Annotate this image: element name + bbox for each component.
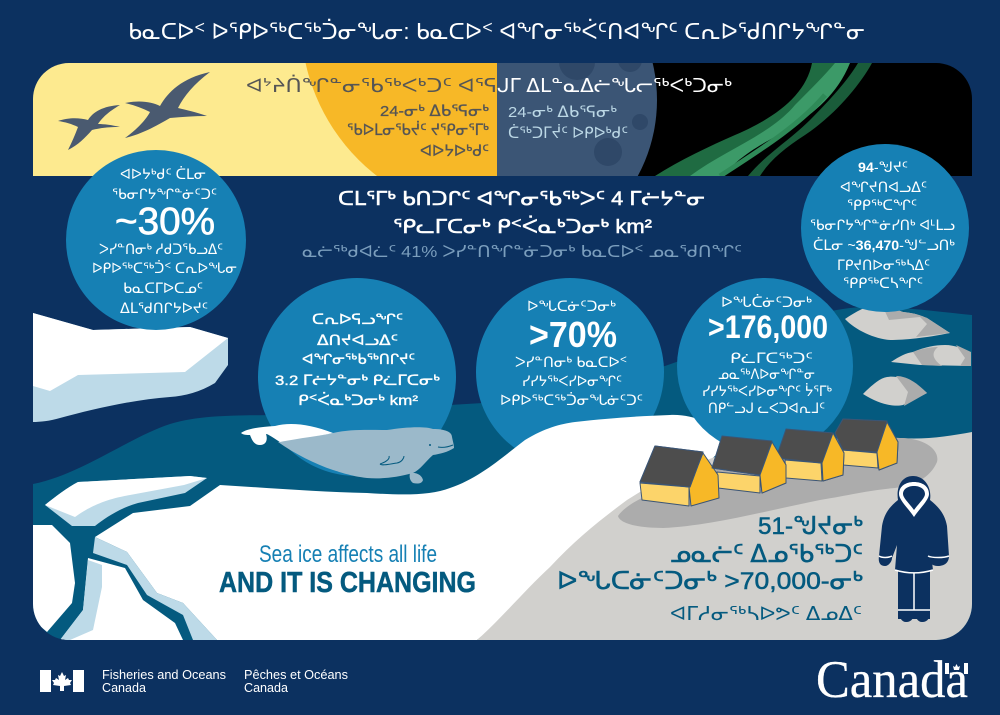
circle stat: islands: ᑖᒪᓂ ~36,470-ᖑᓪᓗᑎᒃ xyxy=(813,237,955,253)
heading: cycles of light: ᒍᒥ ᐃᒪᓐᓇᐃᓖᖓᓕᖅᐸᒃᑐᓂᒃ xyxy=(497,76,732,97)
icon: birds xyxy=(58,72,210,150)
circle stat: 176,000 km coastline: ᑎᑭᓪᓗᒍ ᓚᐸᑐᐊᕆᒧᑦ xyxy=(708,400,825,416)
text: 51 communities xyxy=(557,513,863,625)
circle stat: 30% xyxy=(66,150,246,330)
text: 51 communities: ᓄᓇᓖᑦ ᐃᓄᖃᖅᑐᑦ xyxy=(670,541,863,568)
circle stat: 30%: ᖃᓂᒋᔭᖏᓐᓃᑦᑐᑦ xyxy=(112,186,217,202)
circle stat: more than 70%: ᐅᖓᑕᓃᑦᑐᓂᒃ xyxy=(527,298,616,314)
rocks xyxy=(845,303,971,406)
house 2 xyxy=(712,436,786,493)
title: ᑲᓇᑕᐅᑉ ᐅᕿᐅᖅᑕᖅᑑᓂᖓᓂ: ᑲᓇᑕᐅᑉ ᐊᖏᓂᖅᐹᑦᑎᐊᖏᑦ ᑕᕆᐅᖁᑎᒋᔭᖏᓐᓂ xyxy=(128,18,865,44)
footer: department signature: Fisheries and Oceans xyxy=(102,667,226,682)
text: 51 communities: ᐅᖓᑕᓃᑦᑐᓂᒃ >70,000-ᓂᒃ xyxy=(557,568,863,595)
icon: person in parka xyxy=(879,476,949,622)
text: 24 hours of sun: ᐊᐅᔭᐅᒃᑯᑦ xyxy=(420,143,489,160)
circle stat: islands: ᖃᓂᒋᔭᖏᓐᓃᓯᑎᒃ ᐊᒻᒪᓗ xyxy=(810,217,955,233)
text: central statistic: ᓇᓖᖅᑯᐊᓛᑦ 41% ᐳᓯᓐᑎᖏᓐᓃᑐᓂᒃ ᑲᓇᑕᐅᑉ ᓄᓇᖁᑎᖏᑦ xyxy=(302,244,742,261)
circle stat: 176,000 km coastline: >176,000 xyxy=(708,309,828,345)
text: sea ice affects all life: Sea ice affects all life xyxy=(259,541,437,568)
circle stat: islands: 94-ᖑᔪᑦ xyxy=(858,159,908,175)
circle stat: 30%: ᑲᓇᑕᒥᐅᑕᓄᑦ xyxy=(123,280,203,296)
text: 24 hours of dark xyxy=(508,104,628,142)
snow hill xyxy=(95,415,735,640)
circle stat: islands: ᕿᑭᖅᑕᓴᖏᑦ xyxy=(843,275,923,291)
house 1 xyxy=(640,446,719,506)
house 4 xyxy=(835,419,898,470)
text: sea ice affects all life: AND IT IS CHANGING xyxy=(219,567,476,599)
circle stat: 30%: ᐅᑭᐅᖅᑕᖅᑑᑉ ᑕᕆᐅᖓᓂ xyxy=(92,260,237,276)
road xyxy=(618,438,937,528)
footer: department signature: Canada xyxy=(244,680,289,695)
text: central statistic xyxy=(302,189,742,261)
text: sea ice affects all life xyxy=(219,544,475,592)
circle stat: 176,000 km coastline: ᓄᓇᖅᐱᐅᓂᖏᓐᓂ xyxy=(718,366,815,382)
text: 24 hours of sun: 24-ᓂᒃ ᐃᑲᕐᕋᓂᒃ xyxy=(380,103,489,120)
text: 24 hours of sun xyxy=(347,103,489,160)
text: 24 hours of sun: ᖃᐅᒪᓂᖃᔫᑦ ᔪᕿᓂᕐᒥᒃ xyxy=(347,121,489,139)
text: central statistic: ᑕᒪᕐᒥᒃ ᑲᑎᑐᒋᑦ ᐊᖏᓂᖃᖅᐳᑦ 4 ᒥᓖᔭᓐᓂ xyxy=(338,189,705,210)
footer: department signature xyxy=(40,667,348,695)
circle stat: 176,000 km coastline: ᑭᓛᒥᑕᖅᑐᑦ xyxy=(730,350,813,366)
circle stat: 176,000 km coastline xyxy=(677,278,853,454)
circle stat: islands: ᒥᑭᔪᑎᐅᓂᖅᓴᐃᑦ xyxy=(837,257,930,273)
icon: beluga whale xyxy=(241,424,454,484)
heading: cycles of light: ᐊᔾᔨᑏᖏᓐᓂᖃᖅᐸᒃᑐᑦ ᐊᕐᕋ xyxy=(246,74,497,97)
text: 51 communities: ᐊᒥᓱᓂᖅᓴᐅᕗᑦ ᐃᓄᐃᑦ xyxy=(670,604,862,625)
circle stat: more than 70% xyxy=(476,278,664,466)
circle stat: 3.2 million km2: 3.2 ᒥᓖᔭᓐᓂᒃ ᑭᓛᒥᑕᓂᒃ xyxy=(275,372,440,388)
text: 24 hours of dark: ᑖᖅᑐᒥᔫᑦ ᐅᑭᐅᒃᑯᑦ xyxy=(508,124,628,142)
circle stat: 3.2 million km2: ᐊᖏᓂᖅᑲᖅᑎᒋᔪᑦ xyxy=(302,351,415,367)
circle stat: more than 70%: >70% xyxy=(529,314,617,355)
circle stat: more than 70%: ᓯᓯᔭᖅᐸᓯᐅᓂᖏᑦ xyxy=(522,373,622,389)
text: 51 communities: 51-ᖑᔪᓂᒃ xyxy=(758,513,863,540)
circle stat: 3.2 million km2: ᐃᑎᔪᐊᓗᐃᑦ xyxy=(317,332,398,348)
footer: department signature: Pêches et Océans xyxy=(244,667,348,682)
circle stat: more than 70%: ᐳᓯᓐᑎᓂᒃ ᑲᓇᑕᐅᑉ xyxy=(515,354,627,370)
iceberg left xyxy=(33,313,228,422)
footer: Canada wordmark: Canada xyxy=(816,651,968,709)
heading: cycles of light xyxy=(246,74,732,97)
text: central statistic: ᕿᓚᒥᑕᓂᒃ ᑭᑉᐹᓇᒃᑐᓂᒃ km² xyxy=(393,215,652,238)
circle stat: islands: ᕿᑭᖅᑕᖏᑦ xyxy=(847,197,917,213)
gray ground xyxy=(477,432,972,640)
panel: sky band with sun and moon xyxy=(33,63,972,176)
sea xyxy=(33,307,972,640)
circle stat: 30%: ~30% xyxy=(115,201,215,243)
circle stat: 3.2 million km2: ᑕᕆᐅᕋᓗᖏᑦ xyxy=(312,311,403,327)
circle stat: 30%: ᐃᒪᖁᑎᒋᔭᐅᔪᑦ xyxy=(120,300,208,316)
circle stat: islands: ᐊᖏᔪᑎᐊᓗᐃᑦ xyxy=(840,179,927,195)
footer: department signature: Canada xyxy=(102,680,147,695)
circle stat: 176,000 km coastline: ᐅᖓᑖᓃᑦᑐᓂᒃ xyxy=(721,294,812,310)
house 3 xyxy=(783,432,844,482)
houses xyxy=(640,419,898,506)
circle stat: islands xyxy=(801,144,969,312)
circle stat: more than 70%: ᐅᑭᐅᖅᑕᖅᑑᓂᖓᓃᑦᑐᑦ xyxy=(500,392,643,408)
circle stat: 3.2 million km2: ᑭᑉᐹᓇᒃᑐᓂᒃ km² xyxy=(298,392,418,408)
circle stat: 30%: ᐳᓯᓐᑎᓂᒃ ᓱᑯᑐᖃᓗᐃᑦ xyxy=(99,241,223,257)
circle stat: 3.2 million km2 xyxy=(258,278,456,476)
text: 24 hours of dark: 24-ᓂᒃ ᐃᑲᕐᕋᓂᒃ xyxy=(508,104,617,121)
circle stat: 30%: ᐊᐅᔭᒃᑯᑦ ᑖᒪᓂ xyxy=(120,166,206,182)
redrawn roofs over circle xyxy=(640,419,898,493)
cracked ice floes xyxy=(33,476,217,640)
circle stat: 176,000 km coastline: ᓯᓯᔭᖅᐸᓯᐅᓂᖏᑦ ᔮᕐᒥᒃ xyxy=(702,383,832,399)
